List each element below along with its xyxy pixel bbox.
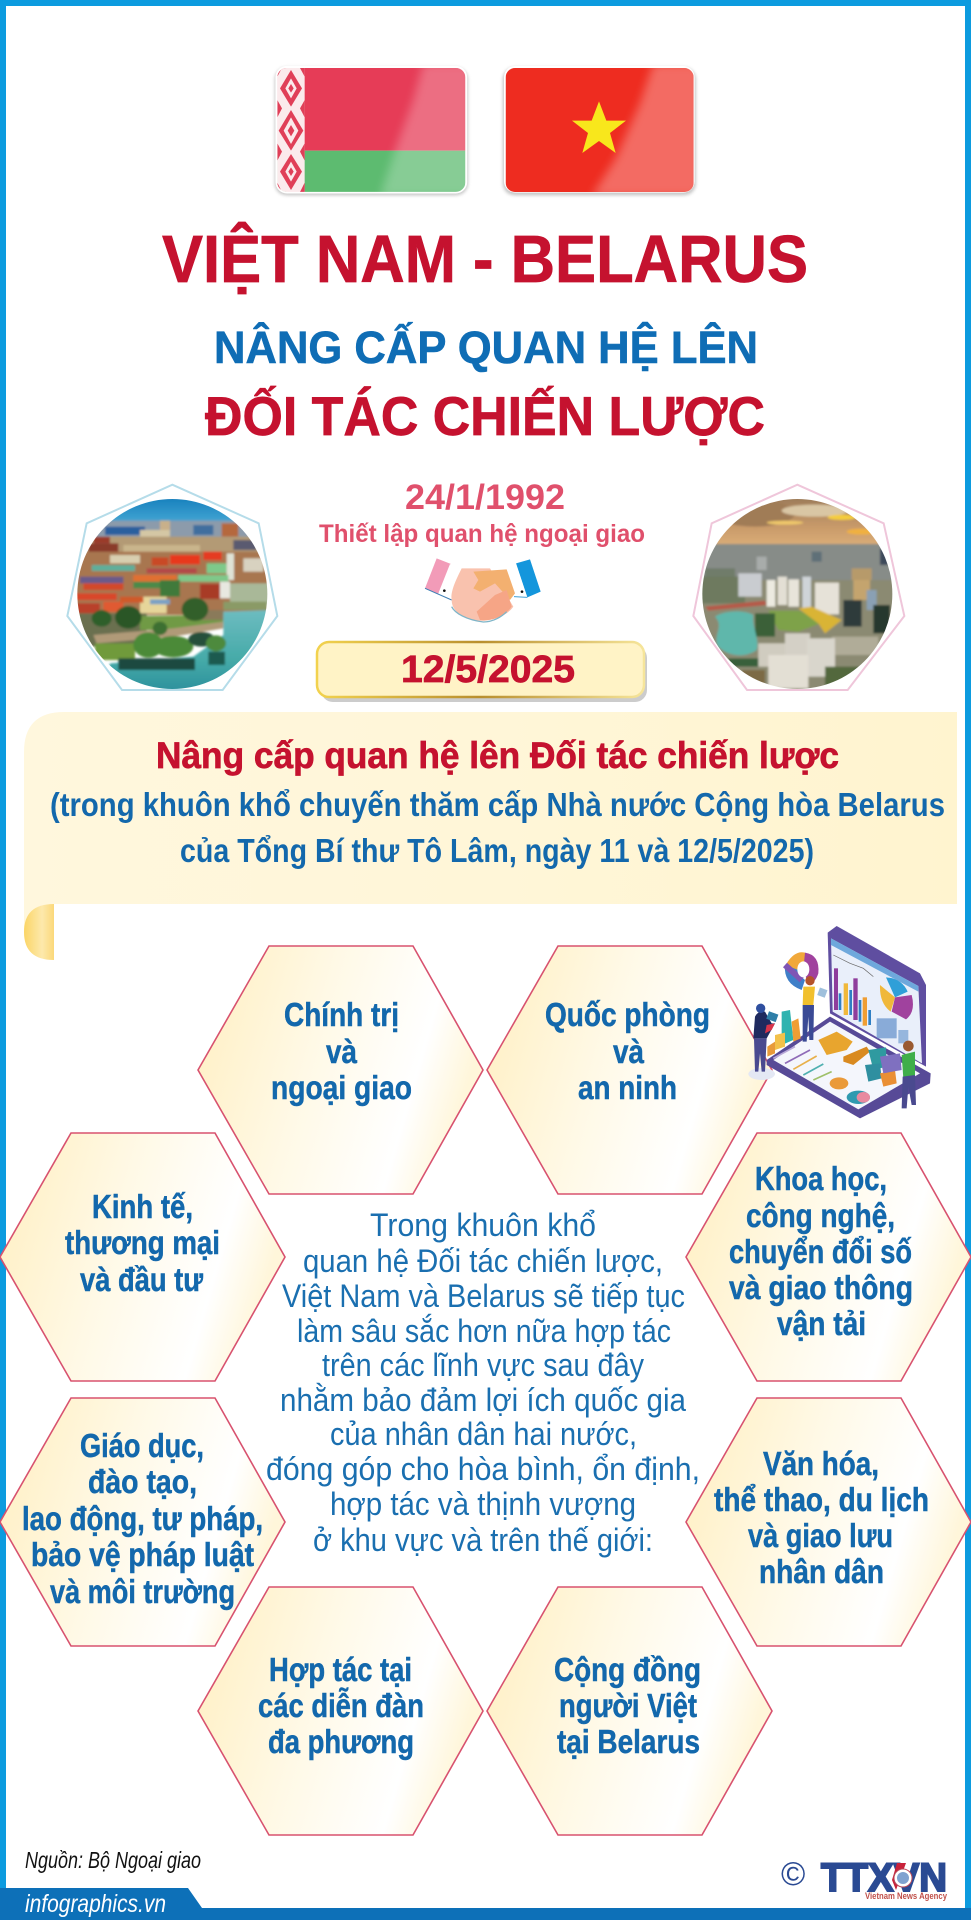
hexagon: politics xyxy=(198,946,483,1194)
source note: Nguồn: Bộ Ngoại giao xyxy=(25,1847,201,1873)
banner note line 2: của Tổng Bí thư Tô Lâm, ngày 11 và 12/5/2025) xyxy=(180,832,814,869)
hexagon: science and technology: công nghệ, xyxy=(746,1197,895,1234)
central text block: quan hệ Đối tác chiến lược, xyxy=(303,1243,663,1279)
hexagon: culture: và giao lưu xyxy=(748,1517,893,1554)
photo: Hanoi skyline xyxy=(693,485,904,693)
hexagon: science and technology: chuyển đổi số xyxy=(729,1233,912,1270)
icon: handshake xyxy=(425,558,541,622)
hexagon: defence: an ninh xyxy=(578,1069,677,1106)
photo: Minsk city xyxy=(67,485,277,693)
banner heading: Nâng cấp quan hệ lên Đối tác chiến lược xyxy=(156,735,839,776)
hexagon: science and technology xyxy=(686,1133,971,1381)
hexagon: education: và môi trường xyxy=(50,1573,235,1610)
date badge 2025: 12/5/2025 xyxy=(401,649,575,691)
hexagon: culture: Văn hóa, xyxy=(763,1445,879,1482)
logo: TTXVN: TTXVN xyxy=(821,1856,947,1900)
hexagon: Vietnamese community: người Việt xyxy=(559,1687,697,1724)
hexagon: politics: và xyxy=(326,1033,358,1070)
hexagon: Vietnamese community: tại Belarus xyxy=(557,1723,700,1760)
hexagon: science and technology: và giao thông xyxy=(729,1269,913,1306)
central text block: Việt Nam và Belarus sẽ tiếp tục xyxy=(282,1278,685,1314)
hexagon: education: Giáo dục, xyxy=(80,1427,204,1464)
hexagon: multilateral forums: các diễn đàn xyxy=(258,1687,424,1724)
central text block: trên các lĩnh vực sau đây xyxy=(322,1347,644,1383)
central text block xyxy=(266,1207,700,1558)
central text block: của nhân dân hai nước, xyxy=(330,1416,637,1452)
subtitle line 1: NÂNG CẤP QUAN HỆ LÊN xyxy=(214,322,758,373)
hexagon: education: lao động, tư pháp, xyxy=(22,1500,263,1537)
central text block: Trong khuôn khổ xyxy=(370,1207,596,1243)
hexagon: economy: Kinh tế, xyxy=(92,1188,193,1225)
hexagon: economy: và đầu tư xyxy=(80,1261,203,1298)
hexagon: defence: Quốc phòng xyxy=(545,996,710,1033)
hexagon: education: bảo vệ pháp luật xyxy=(31,1536,254,1573)
date 1992: 24/1/1992 xyxy=(405,478,565,517)
central text block: ở khu vực và trên thế giới: xyxy=(313,1522,653,1558)
central text block: nhằm bảo đảm lợi ích quốc gia xyxy=(280,1382,686,1418)
footer band xyxy=(0,1888,971,1920)
hexagon: Vietnamese community: Cộng đồng xyxy=(554,1651,701,1688)
hexagon: politics: ngoại giao xyxy=(271,1069,412,1106)
hexagon: economy: thương mại xyxy=(65,1224,220,1261)
hexagon: science and technology: vận tải xyxy=(777,1305,866,1342)
hexagon: economy xyxy=(0,1133,285,1381)
hexagon: education xyxy=(0,1398,285,1646)
title: VIỆT NAM - BELARUS xyxy=(162,222,808,297)
hexagon: science and technology: Khoa học, xyxy=(755,1160,887,1197)
hexagon: politics: Chính trị xyxy=(284,996,399,1033)
panel: upgraded relations banner xyxy=(24,712,957,960)
hexagon: defence: và xyxy=(613,1033,645,1070)
flag ornament xyxy=(277,68,305,192)
logo: TTXVN: © xyxy=(781,1855,805,1892)
hexagon: culture xyxy=(686,1398,971,1646)
scroll fold xyxy=(24,904,54,960)
hexagon: multilateral forums: đa phương xyxy=(268,1723,414,1760)
central text block: làm sâu sắc hơn nữa hợp tác xyxy=(297,1313,671,1349)
hexagon: defence xyxy=(487,946,772,1194)
subtitle line 2: ĐỐI TÁC CHIẾN LƯỢC xyxy=(205,385,765,447)
icon: Belarus flag xyxy=(275,63,473,197)
central text block: đóng góp cho hòa bình, ổn định, xyxy=(266,1451,700,1487)
hexagon: multilateral forums xyxy=(198,1587,483,1835)
caption: diplomatic relations: Thiết lập quan hệ ngoại giao xyxy=(319,520,645,548)
hexagon: Vietnamese community xyxy=(487,1587,772,1835)
date badge 2025 xyxy=(317,642,647,702)
hexagon: culture: nhân dân xyxy=(759,1553,884,1590)
central text block: hợp tác và thịnh vượng xyxy=(330,1486,636,1522)
hexagon: multilateral forums: Hợp tác tại xyxy=(269,1651,412,1688)
illustration: analytics dashboard xyxy=(748,926,931,1118)
icon: Vietnam flag xyxy=(503,63,700,197)
logo: TTXVN: Vietnam News Agency xyxy=(865,1891,947,1901)
site url: infographics.vn xyxy=(25,1890,166,1918)
hexagon: culture: thể thao, du lịch xyxy=(714,1481,929,1518)
hexagon: education: đào tạo, xyxy=(88,1463,197,1500)
